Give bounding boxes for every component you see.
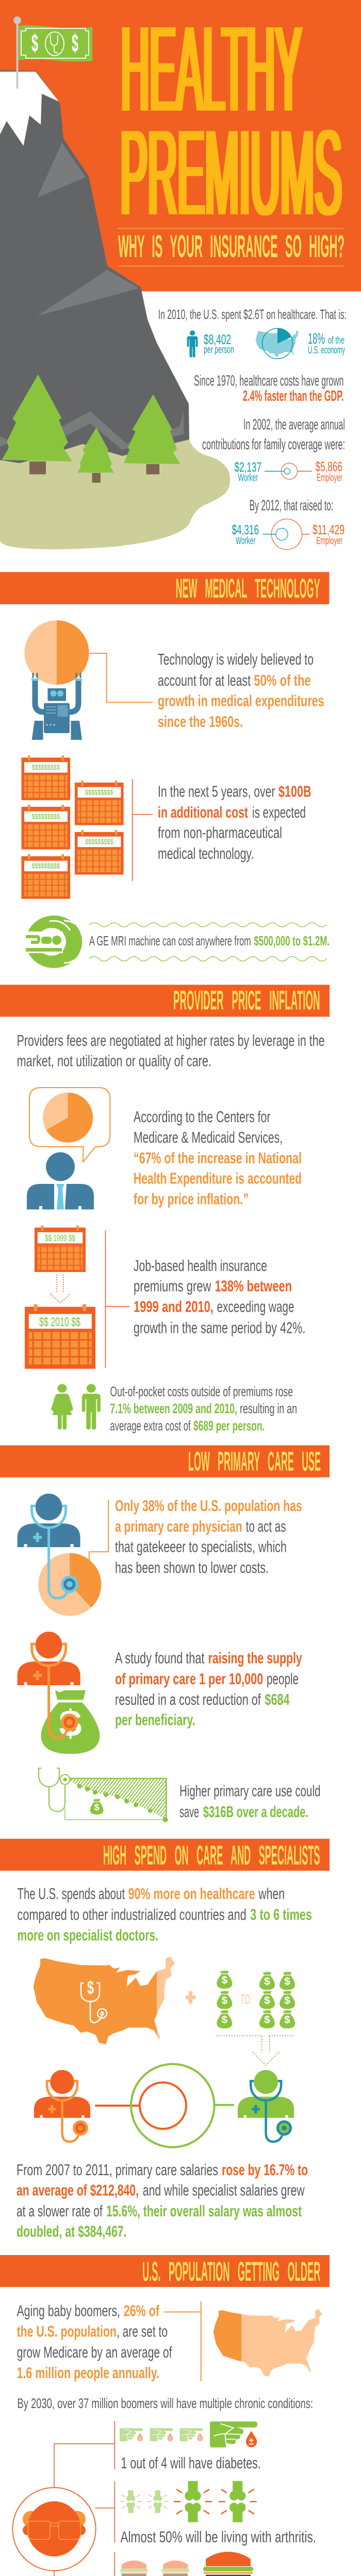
stethoscope head [61, 1575, 78, 1593]
text: 100B additional cost: In the next 5 years, over [158, 782, 275, 801]
connectors: boomer face to conditions [54, 2421, 114, 2576]
small tree [77, 428, 114, 483]
calendar 2: $$$$$$$$$ [32, 812, 60, 820]
icon: money bags 3 to 6 [217, 1971, 295, 2028]
text: baby boomers medicare: Aging baby boomers, [17, 2301, 120, 2319]
calendar 1999: $$ 1999 $$ [45, 1233, 75, 1243]
calendar 5: $$$$$$$$$ [85, 838, 113, 846]
text: 38 percent primary care: has been shown to lower costs. [115, 1558, 269, 1577]
connector: robot to text [89, 653, 153, 702]
condition: arthritis [120, 2481, 316, 2546]
half pie [25, 620, 89, 685]
icon: full hand [210, 2421, 257, 2448]
calendar 1: $$$$$$$$$ [32, 763, 60, 771]
text: out-of-pocket costs [110, 1384, 297, 1434]
icon: robot holding half pie [25, 620, 89, 740]
icon: doctor with money bag [18, 1632, 100, 1754]
chart: 2002 worker vs employer: $5,866 [316, 459, 342, 474]
callout: MRI cost: A GE MRI machine can cost anywhere from [89, 933, 251, 948]
text: study supply of primary care: resulted in a cost reduction of [115, 1690, 261, 1708]
icon: money bags 3 to 6: $ [284, 2014, 290, 2026]
big tree [2, 375, 72, 474]
icon: faded burgers [120, 2561, 189, 2576]
salary line primary [96, 2105, 139, 2107]
text: 90 percent more: The U.S. spends about [18, 1885, 125, 1903]
icon: US map with stethoscope [34, 1957, 175, 2044]
text: 316B savings [179, 1782, 320, 1821]
chart: 2012 worker vs employer: Worker [236, 535, 256, 547]
calendar 5 [75, 830, 124, 875]
text: salaries: From 2007 to 2011, primary care salaries [17, 2161, 218, 2179]
text: job-based premiums [134, 1257, 305, 1337]
text: technology 50 percent: since the 1960s. [158, 713, 243, 731]
text: job-based premiums: 1999 and 2010, [134, 1297, 214, 1315]
doctor: specialist [238, 2070, 294, 2142]
pie 67 percent [43, 1093, 93, 1143]
circle: specialist salary [131, 2064, 215, 2147]
text: 38 percent primary care: that gatekeeer to specialists, which [115, 1538, 287, 1556]
text: 100B additional cost: is expected [252, 803, 306, 821]
text: 90 percent more: when [258, 1885, 285, 1903]
text: 100B additional cost: from non-pharmaceutical [158, 824, 282, 842]
text: 90 percent more: compared to other industrialized countries and [18, 1905, 247, 1924]
icon: calendars with dollars [22, 755, 124, 899]
chart: 2012 worker vs employer: Employer [316, 535, 342, 547]
connector: text to map [164, 2301, 201, 2381]
chart: 2012 worker vs employer: $4,316 [232, 522, 259, 537]
calendar 3: $$$$$$$$$ [32, 861, 60, 870]
text: 38 percent primary care: a primary care physician [115, 1517, 242, 1535]
text: 90 percent more [18, 1885, 312, 1944]
text: study supply of primary care: per beneficiary. [115, 1710, 195, 1728]
text: salaries [17, 2161, 308, 2241]
text: 90 percent more: 3 to 6 times [250, 1905, 312, 1924]
text: baby boomers medicare: , are set to [117, 2323, 168, 2341]
icon: plus [186, 1991, 196, 2004]
illustration: mountain with flag and trees [0, 16, 230, 549]
text: job-based premiums: exceeding wage [217, 1297, 294, 1315]
flag: $ [72, 30, 78, 57]
icon: calendars 1999 to 2010 [25, 1226, 95, 1369]
text: 100B additional cost [158, 782, 311, 862]
text: technology 50 percent: account for at least [158, 671, 251, 689]
text: salaries: an average of $212,840, [17, 2181, 139, 2199]
text: out-of-pocket costs: $689 per person. [193, 1418, 265, 1434]
text: 100B additional cost: $100B [278, 782, 311, 801]
text: technology 50 percent: 50% of the [254, 671, 311, 689]
icon: money bags 3 to 6: $ [264, 2014, 270, 2026]
flag pole ball [13, 16, 21, 24]
text: salaries: doubled, at $384,467. [17, 2223, 127, 2241]
text: 100B additional cost: in additional cost [158, 803, 248, 821]
text: technology 50 percent [158, 650, 324, 731]
section heading: high spend [0, 1839, 330, 1871]
condition: obesity [120, 2552, 314, 2576]
text: job-based premiums: 138% between [215, 1277, 292, 1295]
calendar 4 [75, 781, 124, 825]
text: baby boomers medicare: the U.S. population [17, 2323, 117, 2341]
title [120, 1, 342, 240]
text: growth since 1970 [194, 373, 343, 404]
text: CMS quote: Medicare & Medicaid Services, [134, 1128, 283, 1146]
section heading: provider price inflation [0, 985, 330, 1017]
money bag: $ [59, 1703, 82, 1744]
text: job-based premiums: premiums grew [134, 1277, 211, 1295]
icon: money bags 3 to 6: TO [240, 1992, 250, 2007]
text: salaries: at a slower rate of [17, 2202, 103, 2220]
text: 316B savings: $316B over a decade. [203, 1803, 308, 1821]
text: providers fees [17, 1031, 325, 1070]
doctor [18, 1632, 80, 1685]
stethoscope head [61, 1714, 78, 1731]
stat: per person [187, 330, 234, 358]
icon: woman and man [51, 1384, 101, 1430]
flag: $ [31, 30, 38, 57]
text: salaries: rose by 16.7% to [222, 2161, 308, 2179]
stat: per person: $8,402 [204, 332, 231, 347]
section heading: population getting older [0, 2255, 330, 2287]
text: out-of-pocket costs: average extra cost of [110, 1418, 191, 1434]
icon: money bags 3 to 6: $ [284, 1995, 290, 2006]
text: 38 percent primary care: to act as [246, 1517, 286, 1535]
robot [31, 673, 82, 740]
text: 100B additional cost: medical technology. [158, 844, 254, 862]
stat: share of economy: of the [328, 335, 344, 346]
flag [19, 25, 92, 62]
ground [0, 439, 230, 549]
salary line specialist [215, 2104, 233, 2106]
calendar 2 [22, 805, 70, 850]
text: CMS quote: According to the Centers for [134, 1108, 270, 1126]
connector: pie to text [89, 1500, 108, 1560]
chart: 2002 worker vs employer: $2,137 [234, 459, 261, 474]
chart: 2002 worker vs employer: Employer [317, 472, 342, 484]
doctor [18, 1494, 80, 1547]
text: baby boomers medicare: 26% of [124, 2301, 159, 2319]
icon: MRI machine [26, 916, 85, 968]
icon: full burger [203, 2552, 253, 2576]
icon: person [187, 330, 198, 358]
text: 2002 contributions [202, 416, 345, 453]
icon: faded joints [120, 2490, 168, 2513]
mountain facets [37, 143, 86, 198]
man [27, 1152, 94, 1210]
text: 90 percent more: more on specialist doctors. [18, 1926, 158, 1944]
text: job-based premiums: Job-based health insurance [134, 1257, 267, 1275]
icon: doctor with pie [18, 1494, 101, 1616]
chart: stethoscope savings curve [39, 1768, 168, 1822]
text: out-of-pocket costs: resulting in an [240, 1401, 297, 1416]
text: study supply of primary care: people [267, 1670, 299, 1688]
stethoscope tube [49, 1666, 67, 1738]
section heading: low primary care use [0, 1445, 330, 1478]
text: out-of-pocket costs: 7.1% between 2009 and 2010, [110, 1401, 237, 1416]
stat: per person: per person [204, 344, 234, 355]
right tree [124, 395, 180, 474]
stat: share of economy: 18% [308, 331, 325, 347]
icon: full joints [174, 2481, 257, 2522]
calendar 2010 [25, 1304, 95, 1369]
connector: calendars to text [133, 779, 153, 881]
chart: 2002 worker vs employer: Worker [238, 472, 258, 484]
icon: man with speech bubble and pie [27, 1088, 110, 1210]
icon: money bags 3 to 6: $ [221, 1974, 228, 1986]
small bag [90, 1799, 103, 1815]
icon: boomer face [12, 2487, 96, 2571]
text: study supply of primary care: of primary care 1 per 10,000 [115, 1670, 263, 1688]
icon: US map with stethoscope: $ [87, 1977, 94, 1998]
text: baby boomers medicare: grow Medicare by an average of [17, 2343, 172, 2361]
text: providers fees: market, not utilization or quality of care. [17, 1052, 211, 1070]
flag pole [17, 22, 19, 89]
icon: money bags 3 to 6: $ [221, 2014, 228, 2026]
text: CMS quote: for by price inflation.” [134, 1190, 249, 1208]
icon: map with pie [256, 328, 299, 359]
small bag: $ [94, 1802, 100, 1812]
lower ridge [0, 411, 184, 450]
calendar 1 [22, 755, 70, 800]
icon: faded hands [120, 2428, 203, 2442]
condition: diabetes [120, 2421, 261, 2472]
text: baby boomers medicare: 1.6 million people annually. [17, 2364, 159, 2382]
snow cap [0, 72, 59, 146]
calendar 2010: $$ 2010 $$ [39, 1315, 80, 1329]
chart: primary care vs specialist salaries [34, 2064, 294, 2147]
text: CMS quote [134, 1108, 302, 1208]
callout: MRI cost [89, 923, 330, 961]
condition: diabetes: 1 out of 4 will have diabetes. [121, 2454, 261, 2472]
chart: 2012 worker vs employer: $11,429 [313, 522, 344, 537]
chart: 2002 worker vs employer [234, 459, 342, 484]
text: 90 percent more: 90% more on healthcare [128, 1885, 255, 1903]
text: baby boomers medicare [17, 2301, 172, 2382]
text: 38 percent primary care [115, 1497, 302, 1577]
speech bubble [29, 1088, 110, 1162]
section heading: new medical technology [0, 572, 329, 604]
stat: share of economy [256, 328, 345, 359]
circle: primary salary [140, 2082, 186, 2129]
text: study supply of primary care [115, 1649, 302, 1728]
pie 38 percent [38, 1553, 101, 1616]
icon: US map 26 percent [214, 2309, 322, 2377]
text: study supply of primary care: A study found that [115, 1649, 205, 1667]
calendar 1999 [35, 1226, 86, 1272]
icon: money bags 3 to 6: $ [221, 1995, 228, 2006]
header background [0, 0, 361, 292]
icon: money bags 3 to 6: $ [264, 1976, 270, 1987]
chart: 2012 worker vs employer [232, 519, 344, 550]
dotted arrow [50, 1275, 70, 1303]
text: study supply of primary care: raising the supply [208, 1649, 302, 1667]
arrow: dotted down to specialist [216, 2036, 294, 2065]
doctor: primary care [34, 2070, 90, 2142]
connector: calendars to text [105, 1230, 129, 1368]
icon: money bags 3 to 6: $ [284, 1976, 290, 1987]
stethoscope tube [49, 1528, 67, 1598]
text: study supply of primary care: $684 [265, 1690, 290, 1708]
calendar 3 [22, 854, 70, 899]
icon: money bags 3 to 6: $ [264, 1995, 270, 2006]
text: 316B savings: save [179, 1803, 199, 1821]
mountain [0, 70, 189, 463]
money bag [41, 1690, 100, 1754]
calendar 4: $$$$$$$$$ [85, 788, 113, 796]
